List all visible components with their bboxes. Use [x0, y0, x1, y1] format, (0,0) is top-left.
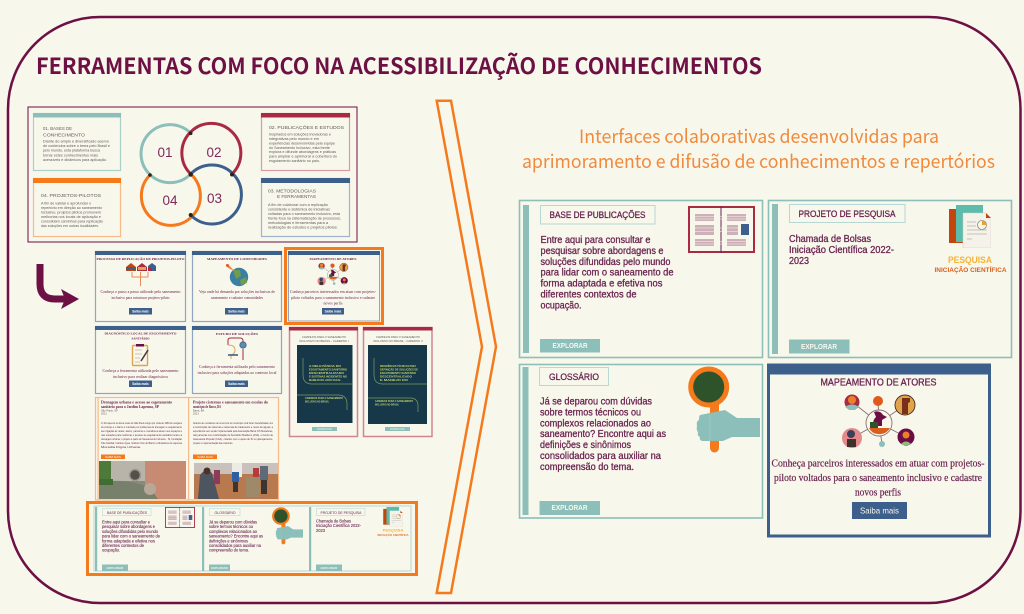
- text block: soluções difundidas pelo mundo: [540, 256, 671, 268]
- card: mapeamento de atores highlighted: MAPEAMENTO DE ATORES: [310, 257, 357, 261]
- mini: glossário: compreensão do tema.: [209, 548, 249, 553]
- icon: pipes and gauge: [228, 338, 246, 360]
- mini: base de publicações: soluções difundidas pelo mundo: [102, 529, 159, 534]
- text: pesquisa iniciação científica: [934, 255, 1007, 274]
- button: explorar: EXPLORAR: [801, 342, 838, 351]
- panel: projeto de pesquisa: [768, 200, 1012, 358]
- card: 04 projetos-pilotos: A fim de validar e aprofundar o: [41, 202, 91, 206]
- card: processo de replicação: inclusivo para estruturar projetos-piloto: [112, 296, 170, 300]
- heading: interfaces colaborativas: aprimoramento e difusão de conhecimentos e repertórios: [522, 148, 995, 174]
- text: project Jardim Lapenna: sanitário para o Jardim Lapenna, SP: [101, 405, 160, 409]
- mini: glossário: definições e sinônimos: [209, 538, 248, 543]
- card: 01 bases de conhecimento: tornar estes conhecimentos mais: [43, 153, 98, 157]
- text block: ocupação.: [540, 299, 582, 311]
- label: BASE DE PUBLICAÇÕES: [550, 210, 646, 221]
- card: 02 publicações e estudos: esgotamento sanitário no país.: [269, 159, 320, 163]
- card: diagnóstico local: [95, 326, 186, 394]
- text block: Chamada de Bolsas: [789, 233, 871, 245]
- text block: pesquisar sobre abordagens e: [540, 245, 664, 257]
- card: 02 publicações e estudos: integrativas pelo mundo e em: [269, 137, 319, 141]
- card: caderno I: [289, 327, 358, 436]
- card: 03 metodologias e ferramentas: voltadas para o saneamento inclusivo, esta: [268, 212, 340, 216]
- text block: sobre termos técnicos ou: [540, 406, 641, 418]
- mini: projeto de pesquisa: [316, 507, 408, 571]
- mini: base de publicações: ocupação.: [102, 548, 120, 553]
- mini: glossário: GLOSSÁRIO: [214, 511, 236, 515]
- card: diagnóstico local: SANITÁRIO: [132, 336, 150, 340]
- card: 01 bases de conhecimento: acessíveis e dinâmicos para aplicação.: [43, 158, 107, 162]
- card: processo de replicação: Saiba mais: [132, 310, 149, 314]
- text: project Jardim Lapenna: SAIBA MAIS: [105, 455, 121, 459]
- chart: interlocking circles 01-04: 04: [162, 192, 178, 208]
- card: mapeamento de atores highlighted: [286, 248, 382, 324]
- chart: interlocking circles 01-04: 03: [207, 190, 222, 206]
- card: mapeamento de atores highlighted: piloto voltados para o saneamento inclusivo e cadastre: [291, 296, 375, 300]
- text block: piloto voltados para o saneamento inclusivo e cadastre: [774, 473, 983, 484]
- icon: documents: [949, 205, 991, 248]
- card: 04 projetos-pilotos: melhorias nos locais de aplicação e: [41, 215, 101, 219]
- panel: mapeamento de atores: MAPEAMENTO DE ATORES: [820, 378, 937, 388]
- text: project Barra: [193, 400, 274, 459]
- text block: saneamento? Encontre aqui as: [540, 428, 666, 440]
- text: project Jardim Lapenna: sem ligação às redes; assim, parceiros e moradores atuam nos espaços e: [101, 429, 182, 433]
- card: mapeamento de atores highlighted: Conheça parceiros interessados em atuar com projetos-: [290, 290, 377, 294]
- label: [540, 368, 608, 386]
- heading: interfaces colaborativas: Interfaces colaborativas desenvolvidas para: [579, 123, 939, 149]
- card: 03 metodologias e ferramentas: E FERRAMENTAS: [277, 194, 316, 199]
- text block: [540, 234, 674, 311]
- mini: base de publicações: para lidar com o saneamento de: [102, 534, 161, 539]
- card: caderno I: E SISTEMAS INCIDENTES NO: [309, 374, 348, 378]
- card: 03 metodologias e ferramentas: frente foca na sistematização de processos,: [268, 216, 341, 220]
- label: [790, 204, 905, 222]
- card: 02 publicações e estudos: experiências desenvolvidas pela equipe: [269, 141, 335, 145]
- card: caderno I: INCLUSIVO NO BRASIL: [305, 400, 329, 404]
- card: mapeamento de comunidades: [192, 251, 282, 322]
- card: diagnóstico local: DIAGNÓSTICO LOCAL DE ESGOTAMENTO: [104, 330, 177, 336]
- text: project Barra: SAIBA MAIS: [197, 455, 213, 459]
- text: pesquisa iniciação científica: INICIAÇÃO CIENTÍFICA: [934, 266, 1007, 274]
- panel: base de publicações: [520, 200, 762, 358]
- card: 02 publicações e estudos: para ampliar e aprimorar a cobertura do: [269, 155, 337, 159]
- card: caderno II: ESGOTAMENTO SANITÁRIO: [380, 370, 417, 375]
- card: 01 bases de conhecimento: de conteúdos sobre o tema pelo Brasil e: [43, 144, 110, 148]
- mini: base de publicações: diferentes contextos de: [102, 543, 145, 548]
- text block: diferentes contextos de: [540, 288, 637, 300]
- text: project Jardim Lapenna: do córrego e o bairro é marcado por problemas de drenagem e esgotamento: [101, 425, 182, 429]
- card: 03 metodologias e ferramentas: metodologias e ferramentas para a: [268, 221, 328, 225]
- card: 02 publicações e estudos: [261, 113, 350, 170]
- text block: [540, 396, 666, 473]
- card: 04 projetos-pilotos: inclusivo, projetos pilotos promovem: [41, 210, 101, 214]
- button: explorar: [789, 340, 850, 354]
- text: project Jardim Lapenna: 2021: [101, 412, 107, 416]
- card: caderno I: A RELEVÂNCIA DO: [309, 363, 342, 368]
- text: project Jardim Lapenna: Drenagem urbana e acesso ao esgotamento: [101, 400, 172, 404]
- arrow: large orange chevron: [437, 101, 496, 593]
- card: mapeamento de comunidades: Saiba mais: [228, 310, 245, 314]
- chart: interlocking circles 01-04: 01: [158, 144, 173, 160]
- text: project Jardim Lapenna: Moradia Digna Urbana.: [101, 445, 141, 449]
- card: caderno I: CAMINHOS PARA O SANEAMENTO: [302, 335, 347, 339]
- card: caderno II: DESCENTRALIZADO: [380, 374, 413, 378]
- button: explorar: EXPLORAR: [552, 341, 588, 350]
- photo: drainage channel: [99, 461, 186, 499]
- mini: glossário: consolidados para auxiliar na: [209, 543, 262, 548]
- card: processo de replicação: Conheça o passo a passo utilizado pelo saneamento: [100, 290, 181, 294]
- label: GLOSSÁRIO: [549, 372, 599, 383]
- card: 01 bases de conhecimento: Diante do amplo e diversificado acervo: [43, 140, 109, 144]
- card: mapeamento de comunidades: saneamento e cadastre comunidades: [211, 296, 264, 300]
- text: project Jardim Lapenna: O Jd Lapenna na Zona Leste de São Paulo surgiu por volta de 1950 às margens: [101, 421, 182, 425]
- mini: base de publicações: EXPLORAR: [107, 566, 124, 570]
- text block: Iniciação Científica 2022-: [789, 244, 894, 256]
- panel: four knowledge axes: [28, 107, 357, 242]
- card: 04 projetos-pilotos: [33, 178, 121, 236]
- mini: glossário: [209, 508, 303, 571]
- mini: glossário: sobre termos técnicos ou: [209, 524, 254, 529]
- card: 01 bases de conhecimento: CONHECIMENTO: [43, 132, 85, 138]
- mini: glossário: EXPLORAR: [211, 566, 229, 570]
- text block: compreensão do tema.: [540, 461, 634, 473]
- text block: 2023: [789, 255, 809, 267]
- text: project Barra: 2021: [193, 412, 199, 416]
- button: explorar: [540, 339, 600, 352]
- card: estudo de soluções: inclusivo para soluções adaptadas ao contexto local: [198, 371, 276, 375]
- card: 03 metodologias e ferramentas: realização de estudos e projetos pilotos.: [268, 226, 338, 230]
- card: caderno I: CAMINHOS PARA O SANEAMENTO: [305, 396, 344, 400]
- icon: magnifier in hand: [691, 369, 760, 452]
- card: 01 bases de conhecimento: pelo mundo, esta plataforma busca: [43, 149, 100, 153]
- card: caderno II: INCLUSIVO NO BRASIL: [375, 402, 399, 406]
- text: project Barra: experiência vem sendo implementada pela Associação Barra N.S Moradores,: [193, 429, 273, 433]
- card: caderno II: REFERÊNCIAS TÉCNICAS PARA: [380, 363, 416, 368]
- card: estudo de soluções: [192, 326, 282, 394]
- text block: Já se deparou com dúvidas: [540, 396, 652, 408]
- title: FERRAMENTAS COM FOCO NA ACESSIBILIZAÇÃO DE CONHECIMENTOS: [36, 49, 762, 81]
- mini: projeto de pesquisa: EXPLORAR: [321, 566, 338, 570]
- icon: magnifier mini: [273, 508, 303, 544]
- card: estudo de soluções: Saiba mais: [228, 382, 245, 386]
- icon: open book: [689, 206, 754, 253]
- text: project Barra: Assessoria Popular (CAA), coletivo com o apoio do SI no planejamento,: [193, 437, 273, 441]
- card: processo de replicação: PROCESSO DE REPLICAÇÃO DE PROJETOS-PILOTO: [96, 256, 185, 261]
- card: 01 bases de conhecimento: [33, 113, 121, 170]
- card: caderno II: CAMINHOS PARA O SANEAMENTO: [376, 335, 421, 339]
- icon: clipboard: [132, 344, 148, 366]
- mini: base de publicações: [102, 507, 195, 571]
- card: 04 projetos-pilotos: das soluções em outras localidades.: [41, 224, 99, 228]
- icon: three houses and pipes: [126, 263, 156, 286]
- card: mapeamento de atores highlighted: novos perfis: [324, 302, 343, 306]
- text: project Jardim Lapenna: São Paulo, SP: [101, 408, 118, 412]
- card: mapeamento de comunidades: Veja onde há demanda por soluções inclusivas de: [199, 290, 275, 294]
- card: 01 bases de conhecimento: 01. BASES DE: [43, 126, 72, 131]
- card: processo de replicação: [95, 251, 186, 322]
- text block: complexos relacionados ao: [540, 417, 651, 429]
- mini: projeto de pesquisa: Chamada de Bolsas: [316, 518, 351, 524]
- card: caderno I: MANEJO DO LODO FECAL: [309, 378, 341, 382]
- mini: base de publicações: forma adaptada e efetiva nos: [102, 538, 155, 543]
- card: 02 publicações e estudos: Inspirados em soluções inovadoras e: [269, 132, 331, 136]
- icon: documents mini: [383, 507, 403, 527]
- arrow: maroon curved arrow: [40, 264, 79, 309]
- mini: projeto de pesquisa: INICIAÇÃO CIENTÍFICA: [378, 532, 408, 537]
- text: project Jardim Lapenna: nas soluções para melhorar o acesso ao esgotamento sanitário local e à: [101, 433, 182, 437]
- card: 03 metodologias e ferramentas: consistente e sistêmica de iniciativas: [268, 208, 330, 212]
- label: [540, 206, 655, 224]
- text: project Jardim Lapenna: drenagem urbana; o projeto é parte do Saneamento Inclusivo - SI, Fundação: [101, 437, 182, 441]
- text block: novos perfis: [855, 488, 901, 498]
- card: caderno I: INCLUSIVO NO BRASIL - CADERNO I: [300, 339, 349, 343]
- text: project Barra: Através de moradores de uma zona do município rural foram beneficiadas com: [193, 421, 274, 425]
- card: caderno I: DOWNLOAD: [317, 428, 332, 431]
- icon: globe with pin: [226, 264, 248, 286]
- text: project Barra: Projeto cisternas e saneamento em escolas do: [193, 400, 268, 404]
- button: explorar: [540, 501, 600, 515]
- card: diagnóstico local: Saiba mais: [132, 382, 149, 386]
- mini: glossário: complexos relacionados ao: [209, 529, 258, 534]
- mini: base de publicações: BASE DE PUBLICAÇÕES: [107, 510, 148, 515]
- mini: projeto de pesquisa: Iniciação Científica 2022-: [316, 523, 362, 528]
- mini: glossário: Já se deparou com dúvidas: [209, 520, 257, 524]
- card: 03 metodologias e ferramentas: [261, 178, 350, 236]
- button: explorar: EXPLORAR: [552, 503, 588, 512]
- card: caderno II: CAMINHOS PARA O SANEAMENTO: [375, 399, 414, 403]
- text: project Jardim Lapenna: Tide Setúbal, Instituto Água, Instituto Vivo do Bairro e Moradores do Lapenna: [101, 441, 182, 445]
- text block: Conheça parceiros interessados em atuar com projetos-: [772, 458, 984, 470]
- mini: projeto de pesquisa: PESQUISA: [383, 528, 403, 532]
- card: caderno II: E MANEJO DO: [380, 378, 409, 382]
- card: mapeamento de atores highlighted: Saiba mais: [325, 310, 342, 314]
- text block: forma adaptada e efetiva nos: [540, 278, 662, 290]
- card: caderno II: INCLUSIVO NO BRASIL - CADERNO II: [374, 339, 423, 343]
- panel: highlighted interfaces thumbnail: [88, 502, 416, 574]
- panel: mapeamento de atores: [767, 364, 991, 536]
- text block: [789, 233, 894, 267]
- text block: [772, 458, 984, 498]
- card: estudo de soluções: ESTUDO DE SOLUÇÕES: [216, 331, 258, 336]
- card: 02 publicações e estudos: explora e difunde abordagens e práticas: [269, 150, 336, 154]
- text: project Jardim Lapenna: [101, 400, 182, 459]
- button: saiba mais: [852, 502, 907, 519]
- card: 04 projetos-pilotos: repertório em direção ao saneamento: [41, 206, 102, 210]
- chart: interlocking circles 01-04: 02: [206, 144, 222, 160]
- text block: consolidados para auxiliar na: [540, 450, 661, 462]
- text block: definições e sinônimos: [540, 439, 631, 451]
- card: caderno I: ESGOTAMENTO SANITÁRIO: [309, 366, 348, 372]
- card: 04 projetos-pilotos: consolidam caminhos para replicação: [41, 220, 103, 224]
- text: pesquisa iniciação científica: PESQUISA: [948, 255, 992, 265]
- mini: base de publicações: Entre aqui para consultar e: [102, 520, 151, 524]
- card: caderno II: [363, 327, 432, 436]
- button: saiba mais: Saiba mais: [860, 506, 899, 516]
- panel: pilot projects: [96, 397, 278, 500]
- text: project Barra: das parcerias com a Articulação do Semiárido Brasileiro (ASA), o Centro de: [193, 433, 273, 437]
- chart: interlocking circles 01-04: [141, 123, 241, 225]
- text: project Barra: a construção de cisternas e sistemas de tratamento e reúso de águas; a: [193, 425, 273, 429]
- icon: actor network: [842, 394, 915, 448]
- icon: book mini: [165, 507, 195, 528]
- card: 03 metodologias e ferramentas: 03. METODOLOGIAS: [268, 188, 316, 194]
- photo: workers and cistern: [194, 463, 278, 499]
- icon: actor network small: [317, 263, 348, 285]
- card: mapeamento de comunidades: MAPEAMENTO DE COMUNIDADES: [207, 257, 267, 261]
- card: estudo de soluções: Conheça a ferramenta utilizada pelo saneamento: [199, 365, 275, 369]
- card: caderno I: DESCENTRALIZADO: [309, 371, 345, 375]
- text block: Entre aqui para consultar e: [540, 234, 651, 246]
- card: diagnóstico local: inclusivo para realizar diagnósticos: [113, 375, 169, 379]
- label: PROJETO DE PESQUISA: [798, 209, 896, 220]
- mini: projeto de pesquisa: 2023: [316, 528, 326, 533]
- heading: interfaces colaborativas: [522, 123, 995, 174]
- text block: para lidar com o saneamento de: [540, 267, 674, 279]
- mini: projeto de pesquisa: PROJETO DE PESQUISA: [320, 511, 362, 515]
- text: project Barra: projeto e implementação das cisternas.: [193, 441, 233, 445]
- card: diagnóstico local: Conheça a ferramenta utilizada pelo saneamento: [102, 369, 179, 373]
- card: 04 projetos-pilotos: 04. PROJETOS-PILOTOS: [41, 193, 101, 198]
- mini: base de publicações: pesquisar sobre abordagens e: [102, 524, 156, 529]
- card: caderno II: DOWNLOAD: [390, 428, 405, 431]
- card: 02 publicações e estudos: do Saneamento Inclusivo, esta frente: [269, 146, 330, 150]
- panel: tool cards thumbnails: [88, 101, 1012, 593]
- card: 03 metodologias e ferramentas: A fim de colaborar com a replicação: [268, 203, 328, 207]
- card: 02 publicações e estudos: 02. PUBLICAÇÕES E ESTUDOS: [269, 124, 344, 130]
- panel: glossário: [520, 364, 762, 518]
- mini: glossário: saneamento? Encontre aqui as: [209, 534, 263, 539]
- card: caderno II: DEFINIÇÃO DE SOLUÇÕES DE: [380, 366, 418, 372]
- text: project Barra: Barra, BA: [193, 408, 205, 412]
- text: project Barra: município de Barra, BA: [193, 405, 221, 409]
